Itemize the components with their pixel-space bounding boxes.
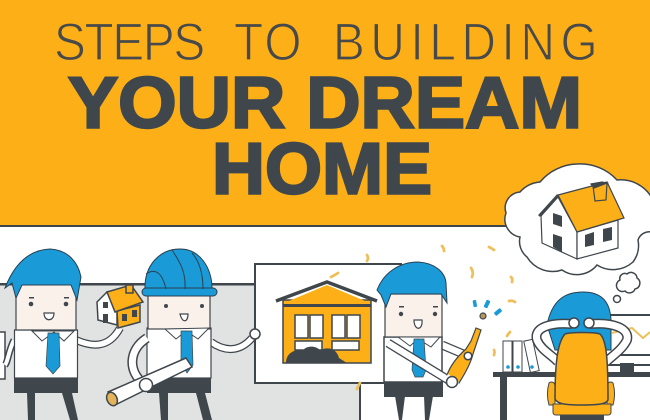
legs	[159, 393, 212, 420]
title: TO	[234, 12, 302, 72]
helmet	[142, 249, 217, 296]
eyes and mouth	[164, 304, 204, 308]
collar	[32, 331, 74, 341]
thought dot	[614, 296, 620, 302]
hands	[446, 376, 458, 388]
pants	[147, 378, 211, 393]
title: HOME	[212, 130, 432, 210]
thought house	[539, 182, 624, 259]
banner bottom line	[0, 225, 650, 227]
tie	[181, 331, 193, 373]
hand	[250, 329, 260, 339]
chair	[548, 332, 614, 420]
left arm	[5, 340, 14, 365]
near arm	[388, 343, 450, 381]
title: BUILDING	[333, 12, 598, 72]
thought bubble	[505, 164, 650, 302]
pants	[384, 382, 443, 397]
hand	[140, 378, 152, 392]
blueprint roll	[108, 358, 192, 405]
body	[384, 337, 442, 382]
person 2 with helmet	[105, 249, 260, 420]
legs	[395, 396, 433, 420]
small board at left edge	[0, 332, 5, 379]
face	[16, 284, 76, 330]
monitor	[600, 315, 650, 372]
hands	[569, 318, 579, 328]
bottle	[447, 328, 481, 383]
binders	[503, 339, 539, 372]
hair	[547, 292, 611, 350]
confetti	[331, 246, 515, 389]
collar	[398, 337, 440, 347]
person 4 at desk	[493, 292, 650, 420]
body	[147, 328, 211, 378]
eyes and mouth	[29, 297, 69, 306]
far arm	[442, 345, 468, 356]
title: YOUR DREAM	[68, 64, 582, 144]
spray	[473, 300, 502, 316]
wall right line	[359, 383, 361, 420]
thought puff	[616, 272, 640, 293]
pants	[14, 378, 78, 393]
cork	[480, 313, 486, 319]
hair	[377, 262, 447, 307]
face	[148, 294, 210, 329]
arms behind head	[536, 324, 627, 362]
mini house	[97, 285, 143, 328]
face	[385, 294, 442, 337]
house drawing on board	[276, 282, 377, 363]
collar	[165, 328, 209, 339]
title	[54, 12, 598, 210]
hair	[5, 249, 81, 300]
person 3 with champagne	[377, 262, 502, 420]
person 1 with house	[5, 249, 143, 420]
orange banner	[0, 0, 650, 225]
board	[255, 264, 401, 383]
right arm	[76, 328, 120, 345]
legs	[27, 393, 78, 420]
wall top line	[0, 283, 256, 286]
left arm	[132, 338, 147, 384]
tie	[46, 333, 60, 374]
tie	[412, 339, 426, 377]
right arm	[211, 338, 252, 349]
desk	[493, 372, 650, 420]
body	[14, 330, 78, 378]
title: STEPS	[54, 12, 205, 72]
grey wall panel	[0, 284, 360, 420]
eyes and mouth	[399, 306, 438, 316]
